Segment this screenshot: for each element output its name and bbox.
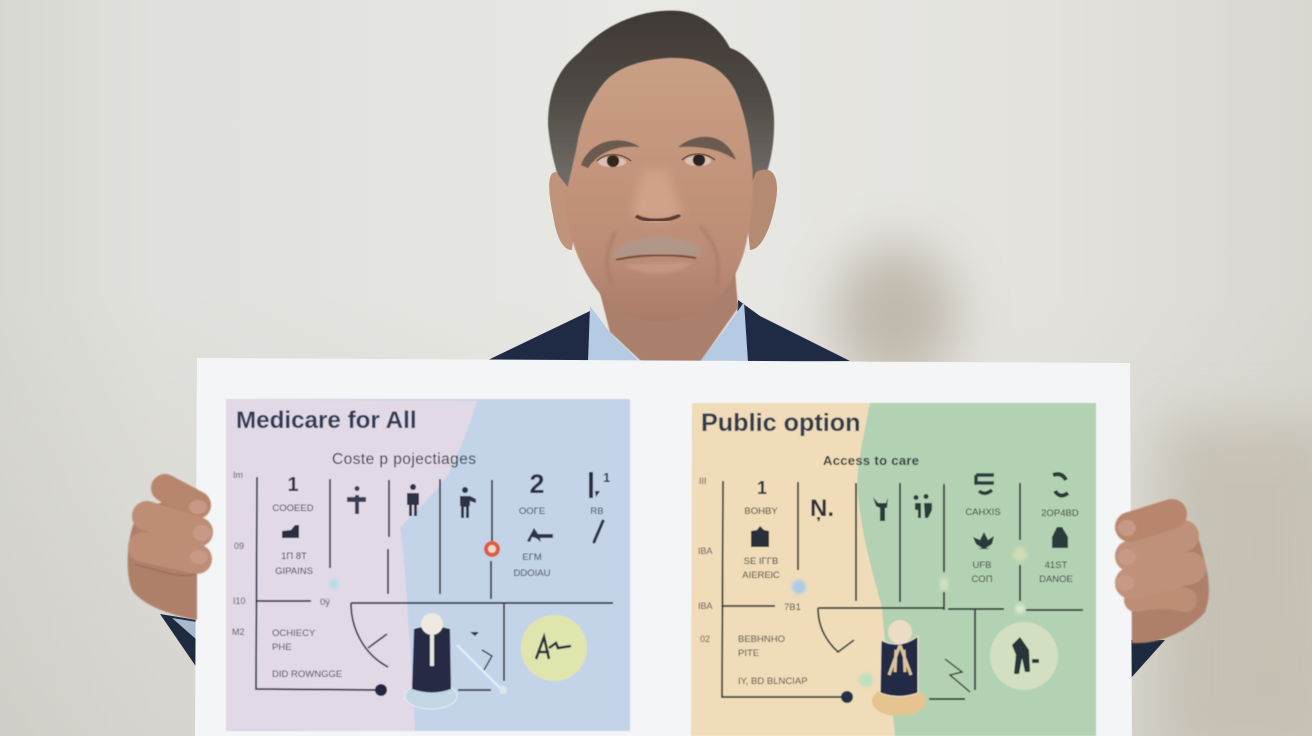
column text: COΠ	[971, 574, 993, 585]
number 1: 1	[757, 478, 767, 498]
axis labels: I10	[233, 596, 246, 606]
column 5 text: EΓM	[522, 552, 542, 563]
icon: number three glyph	[1053, 474, 1068, 496]
hair back	[548, 11, 774, 198]
icon: number five glyph	[976, 475, 994, 493]
icon: bottle	[1052, 527, 1068, 548]
face	[566, 58, 753, 322]
column 1 text: 1Π 8T	[281, 551, 307, 562]
column 5 text: OOΓE	[519, 506, 545, 517]
lower text: OCHIECY	[272, 628, 316, 639]
panel: Public option	[691, 403, 1096, 736]
lower text	[272, 597, 342, 680]
nose	[632, 170, 682, 221]
icon: two figures	[914, 494, 932, 518]
axis labels	[698, 476, 713, 644]
jacket	[488, 300, 850, 362]
eyebrows	[581, 140, 640, 168]
pale dots	[792, 547, 1027, 614]
column 5 text: RB	[590, 506, 604, 517]
yellow circle icon	[521, 615, 587, 681]
column text: 41ST	[1045, 560, 1068, 571]
lower text: DID ROWNGGE	[272, 669, 342, 680]
heading: Medicare for All	[236, 407, 417, 434]
axis labels: Im	[233, 470, 243, 480]
lower text	[738, 602, 808, 687]
right arm sleeve	[1131, 640, 1165, 678]
icon: cross figure	[347, 486, 366, 514]
column 5 text	[514, 506, 604, 579]
lower text: PHE	[272, 642, 292, 653]
axis labels: III	[699, 476, 707, 486]
lower text: 0ÿ	[320, 597, 330, 608]
axis labels	[232, 470, 246, 637]
right hand	[1116, 514, 1209, 643]
heading: Public option	[701, 409, 861, 437]
column text: DANOE	[1039, 574, 1073, 585]
icon: standing figure	[407, 484, 419, 516]
column text: UFB	[972, 560, 992, 571]
lower text: IΥ, BD BLNCIAP	[738, 676, 808, 687]
pale blue glint	[329, 579, 339, 589]
icon: figure tan	[873, 497, 888, 521]
moustache shadow	[614, 237, 702, 260]
icon: figures with dot: Ņ.	[810, 495, 834, 522]
lower text: 7B1	[784, 602, 801, 613]
axis labels: 09	[234, 541, 244, 551]
chart grid lines	[256, 477, 613, 690]
device figure	[405, 613, 507, 709]
axis labels: IBA	[698, 546, 713, 556]
panel background	[226, 399, 630, 731]
panel: Medicare for All	[226, 399, 630, 731]
ears	[549, 172, 578, 250]
pale green circle icon	[990, 622, 1058, 690]
column text: BOHBY	[744, 506, 778, 517]
icon: small block	[282, 525, 299, 538]
lower text: BEBHNHO	[738, 634, 785, 645]
column text: 2OP4BD	[1041, 508, 1079, 519]
shirt collar	[588, 302, 748, 362]
column text: CAHXIS	[965, 507, 1001, 518]
cheek folds	[607, 226, 718, 285]
left arm sleeve	[160, 614, 197, 668]
icon: pointing figure	[460, 487, 476, 518]
number 1 fraction	[589, 470, 610, 498]
neck	[598, 270, 738, 362]
icon: slash	[594, 521, 603, 542]
subheading: Access to care	[823, 453, 919, 468]
column text: AIERElC	[742, 570, 780, 581]
number 1: 1	[287, 474, 299, 496]
device figure	[859, 620, 926, 716]
number 1 fraction: 1	[603, 470, 610, 485]
panel background	[691, 403, 1096, 736]
icon: clipboard person	[751, 526, 769, 547]
man portrait	[488, 11, 850, 362]
column 1 text: COOEED	[272, 503, 314, 514]
dot terminal	[375, 684, 387, 696]
lower text: PITE	[738, 648, 759, 659]
eyes	[598, 157, 626, 167]
axis labels: M2	[232, 627, 245, 637]
column 1 text: GIPAINS	[275, 566, 313, 577]
axis labels: IBA	[698, 601, 713, 611]
icon: red marker	[484, 541, 500, 557]
left hand	[128, 488, 211, 620]
number 2: 2	[529, 469, 545, 499]
mouth	[616, 255, 696, 260]
dot terminal	[841, 691, 853, 703]
axis labels: 02	[700, 634, 710, 644]
icon: arrow hand	[527, 528, 553, 542]
subheading: Coste p pojectiages	[332, 451, 476, 468]
column 1 text	[272, 503, 314, 577]
icon: bird shape	[973, 532, 994, 549]
column text	[742, 506, 1079, 585]
column 5 text: DDOIAU	[514, 568, 551, 579]
white board	[195, 358, 1132, 736]
column text: SE IΓΓB	[744, 556, 778, 567]
chart grid lines	[722, 481, 1083, 699]
